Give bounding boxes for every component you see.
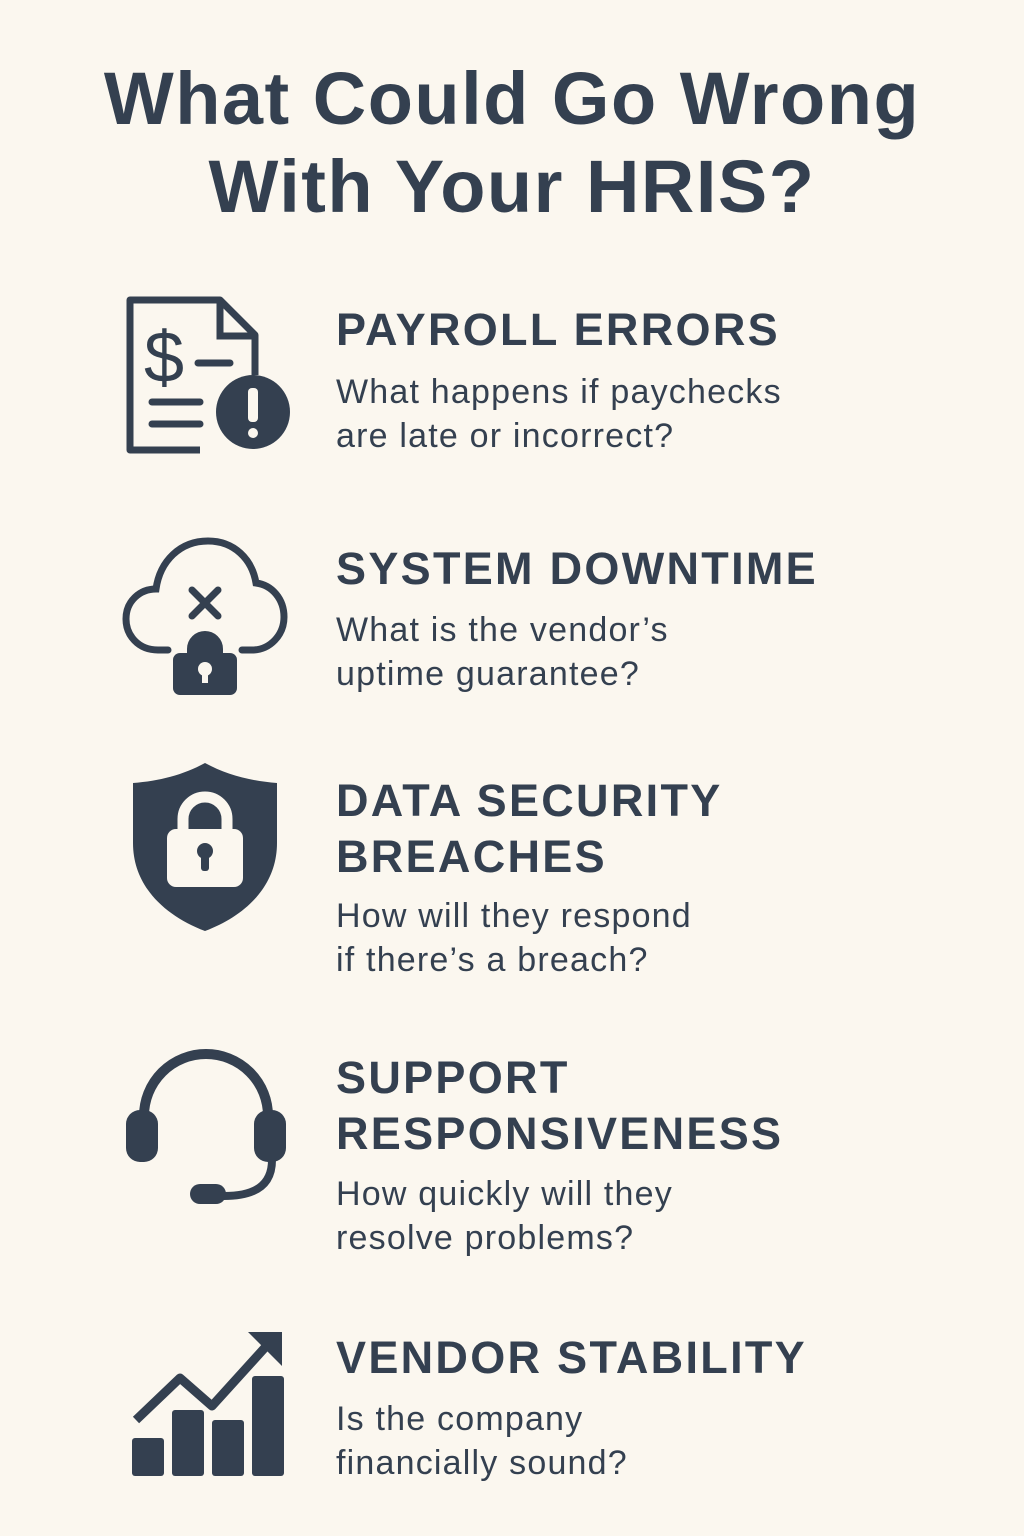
- text: payroll: are late or incorrect?: [336, 417, 674, 455]
- heading: vendor stability: VENDOR STABILITY: [336, 1332, 807, 1383]
- text: vendor: Is the company: [336, 1400, 583, 1438]
- icon: payroll document: [126, 296, 290, 454]
- title: With Your HRIS?: [209, 145, 815, 228]
- title: What Could Go Wrong: [104, 57, 920, 140]
- text: vendor: [336, 1400, 628, 1482]
- text: support: [336, 1175, 673, 1257]
- text: security: How will they respond: [336, 897, 692, 935]
- text: security: if there’s a breach?: [336, 941, 649, 979]
- text: payroll: [336, 373, 782, 455]
- heading: data security breaches: BREACHES: [336, 831, 607, 882]
- heading: payroll errors: PAYROLL ERRORS: [336, 304, 780, 355]
- text: downtime: uptime guarantee?: [336, 655, 640, 693]
- text: support: How quickly will they: [336, 1175, 673, 1213]
- title: [104, 57, 920, 228]
- text: support: resolve problems?: [336, 1219, 634, 1257]
- heading: system downtime: SYSTEM DOWNTIME: [336, 543, 818, 594]
- text: downtime: [336, 611, 669, 693]
- heading: support responsiveness: SUPPORT: [336, 1052, 570, 1103]
- heading: data security breaches: DATA SECURITY: [336, 775, 723, 826]
- text: downtime: What is the vendor’s: [336, 611, 669, 649]
- icon: growth chart: [132, 1332, 284, 1476]
- text: vendor: financially sound?: [336, 1444, 628, 1482]
- heading: support responsiveness: RESPONSIVENESS: [336, 1108, 783, 1159]
- text: payroll: What happens if paychecks: [336, 373, 782, 411]
- icon: headset: [126, 1049, 286, 1204]
- heading: support responsiveness: [336, 1052, 783, 1159]
- heading: data security breaches: [336, 775, 723, 882]
- text: security: [336, 897, 692, 979]
- icon: cloud with lock: [122, 538, 288, 695]
- icon: shield with lock: [133, 763, 277, 931]
- icon: payroll document: $: [144, 318, 184, 398]
